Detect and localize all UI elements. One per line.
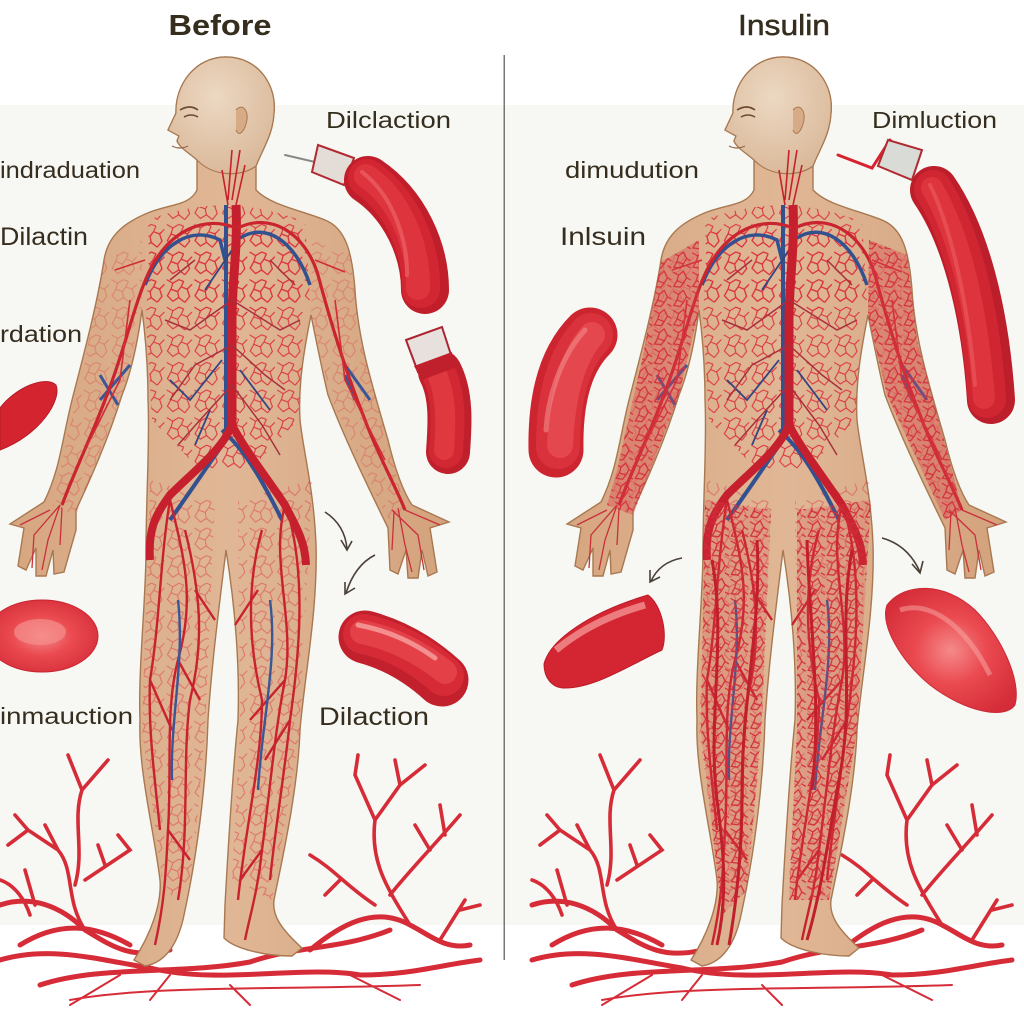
label: dilaction: Dilaction <box>319 703 429 731</box>
label: dilactin: Dilactin <box>0 223 88 251</box>
title: before: Before <box>168 10 272 42</box>
vessel tube: middle left panel <box>406 327 454 452</box>
red cell: disc right panel <box>886 588 1016 712</box>
label: inlsuin: Inlsuin <box>560 223 646 251</box>
vessel tube: top right <box>838 140 991 400</box>
red cell: pill lower left panel <box>358 625 445 680</box>
arrow: insulin right <box>882 538 923 573</box>
arrow: before upper <box>325 512 352 550</box>
vessel network: before <box>0 755 480 1005</box>
arrow: insulin left <box>650 558 682 582</box>
red cell: left edge <box>0 382 57 450</box>
arrow: before lower <box>345 555 375 594</box>
red cell: pill right panel <box>546 330 592 450</box>
figure: before <box>10 57 449 966</box>
label: indraduation: indraduation <box>0 157 140 183</box>
label: dilclaction: Dilclaction <box>326 107 451 133</box>
title: insulin: Insulin <box>738 10 830 42</box>
red cell: disc left <box>0 600 98 672</box>
figure: insulin <box>567 57 1006 966</box>
label: rdation: rdation <box>0 321 82 347</box>
label: dimudution: dimudution <box>565 157 699 183</box>
vessel tube: top left panel <box>285 145 425 290</box>
label: dimluction: Dimluction <box>872 107 997 133</box>
vessel network: insulin <box>532 755 1012 1005</box>
divider <box>504 55 505 960</box>
label: inmauction: inmauction <box>0 703 133 729</box>
red cell: cut tube right panel <box>544 595 664 688</box>
